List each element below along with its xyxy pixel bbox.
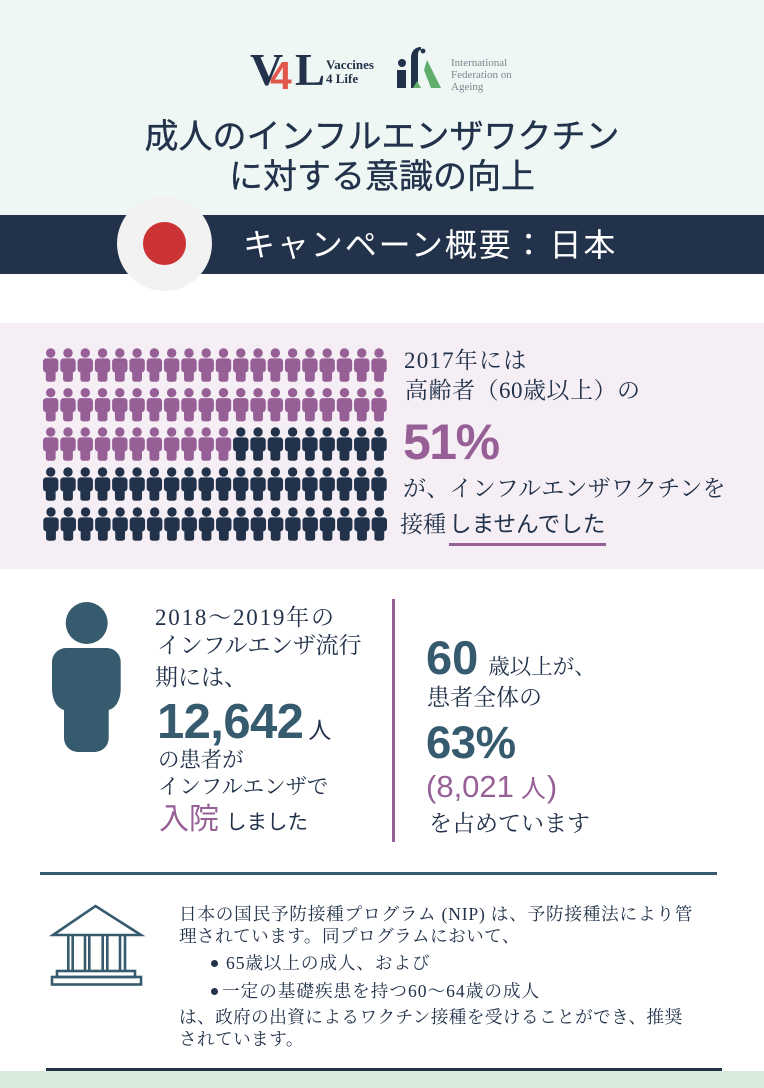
footer band bbox=[0, 1071, 764, 1088]
panel: vaccination rate bbox=[0, 323, 764, 569]
logo: Vaccines 4 Life: L bbox=[295, 45, 325, 95]
text: patients: の患者が bbox=[158, 748, 244, 772]
text: influenza epidemic: インフルエンザ流行 bbox=[157, 633, 361, 658]
divider bbox=[392, 599, 395, 842]
icon: Japan flag bbox=[117, 196, 212, 291]
logo: International Federation on Ageing bbox=[397, 47, 512, 93]
stat: 12,642 people: 12,642人 bbox=[157, 695, 331, 749]
stat: 60 years: 60 歳以上が、 bbox=[426, 631, 596, 684]
underline bbox=[449, 543, 606, 546]
pictogram: 51 of 100 people bbox=[43, 348, 388, 541]
stat: 51%: 51% bbox=[403, 414, 499, 470]
icon: government building bbox=[48, 904, 146, 986]
bottom rule bbox=[46, 1068, 722, 1070]
bullet: 60 to 64 with conditions: 一定の基礎疾患を持つ60～64歳の成人 bbox=[222, 981, 540, 1001]
icon: person bbox=[52, 602, 121, 752]
divider line bbox=[40, 872, 717, 874]
banner heading: キャンペーン概要：日本 bbox=[243, 227, 617, 263]
text: national immunisation programme: 日本の国民予防接種プログラム (NIP) は、予防接種法により管 bbox=[179, 904, 693, 924]
text: hospitalised: 入院 しました bbox=[159, 803, 308, 836]
text: national immunisation programme: されています。 bbox=[179, 1029, 304, 1049]
text: national immunisation programme: 理されています。同プログラムにおいて、 bbox=[179, 926, 520, 946]
header background bbox=[0, 0, 764, 215]
campaign banner bbox=[0, 215, 764, 274]
text: flu season: 2018～2019年の bbox=[155, 605, 336, 630]
logo: Vaccines 4 Life: V bbox=[250, 44, 283, 95]
title: 成人のインフルエンザワクチン bbox=[144, 118, 619, 156]
text: older adults: 高齢者（60歳以上）の bbox=[405, 378, 640, 403]
bullet: 65 and over: 65歳以上の成人、および bbox=[226, 953, 430, 973]
text: account for: を占めています bbox=[429, 811, 590, 836]
logo: Vaccines 4 Life: Vaccines bbox=[326, 57, 374, 72]
stat: 63%: 63% bbox=[426, 717, 516, 768]
stat: 8,021 people: (8,021 人) bbox=[426, 769, 557, 804]
text: influenza vaccine: が、インフルエンザワクチンを bbox=[403, 476, 726, 501]
text: not vaccinated: 接種しませんでした bbox=[400, 512, 605, 537]
text: 2017 intro: 2017年には bbox=[404, 348, 527, 373]
logo: International Federation on Ageing: Ageing bbox=[451, 81, 483, 93]
text: of all patients: 患者全体の bbox=[427, 685, 542, 710]
logo: International Federation on Ageing: Federation on bbox=[451, 69, 512, 81]
logo: Vaccines 4 Life: 4 Life bbox=[326, 71, 358, 86]
text: period: 期には、 bbox=[155, 665, 247, 690]
logo: Vaccines 4 Life: 4 bbox=[270, 55, 292, 98]
logo: International Federation on Ageing: International bbox=[451, 57, 507, 69]
text: national immunisation programme: は、政府の出資によるワクチン接種を受けることができ、推奨 bbox=[179, 1007, 683, 1027]
text: influenza: インフルエンザで bbox=[158, 775, 328, 799]
logo: Vaccines 4 Life bbox=[250, 44, 374, 98]
title: に対する意識の向上 bbox=[229, 158, 535, 196]
text: national immunisation programme bbox=[179, 904, 693, 1049]
title bbox=[144, 118, 619, 196]
